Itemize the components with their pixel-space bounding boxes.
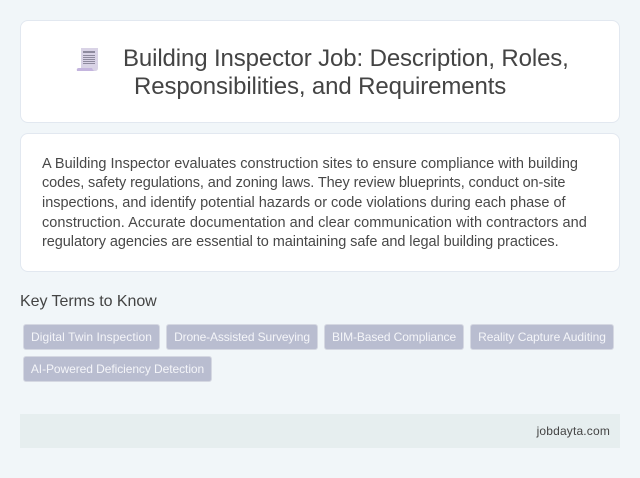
tag: ai-powered deficiency detection	[23, 356, 212, 382]
tag: ai-powered deficiency detection: AI-Powered Deficiency Detection	[31, 362, 204, 376]
description line 1: A Building Inspector evaluates construction sites to ensure compliance with building	[42, 156, 578, 172]
panel: title card	[20, 20, 620, 123]
tag: drone-assisted surveying	[166, 324, 318, 350]
tag: digital twin inspection	[23, 324, 160, 350]
heading: key terms: Key Terms to Know	[20, 293, 157, 310]
icon: document scroll	[76, 48, 98, 71]
description line 4: construction. Accurate documentation and clear communication with contractors and	[42, 215, 587, 231]
description line 3: inspections, and identify potential hazards or code violations during each phase of	[42, 195, 566, 211]
footer text: jobdayta.com	[537, 424, 610, 438]
tag: bim-based compliance	[324, 324, 464, 350]
title line 2: Responsibilities, and Requirements	[134, 73, 506, 100]
title line 1: Building Inspector Job: Description, Roles,	[123, 45, 569, 72]
tag: reality capture auditing	[470, 324, 614, 350]
tag: reality capture auditing: Reality Capture Auditing	[478, 330, 606, 344]
tag: bim-based compliance: BIM-Based Compliance	[332, 330, 456, 344]
tag: drone-assisted surveying: Drone-Assisted Surveying	[174, 330, 310, 344]
description line 5: regulatory agencies are essential to maintaining safe and legal building practices.	[42, 234, 559, 250]
tag: digital twin inspection: Digital Twin Inspection	[31, 330, 152, 344]
panel: description	[20, 133, 620, 272]
footer bar	[20, 414, 620, 448]
description line 2: codes, safety regulations, and zoning laws. They review blueprints, conduct on-site	[42, 175, 565, 191]
